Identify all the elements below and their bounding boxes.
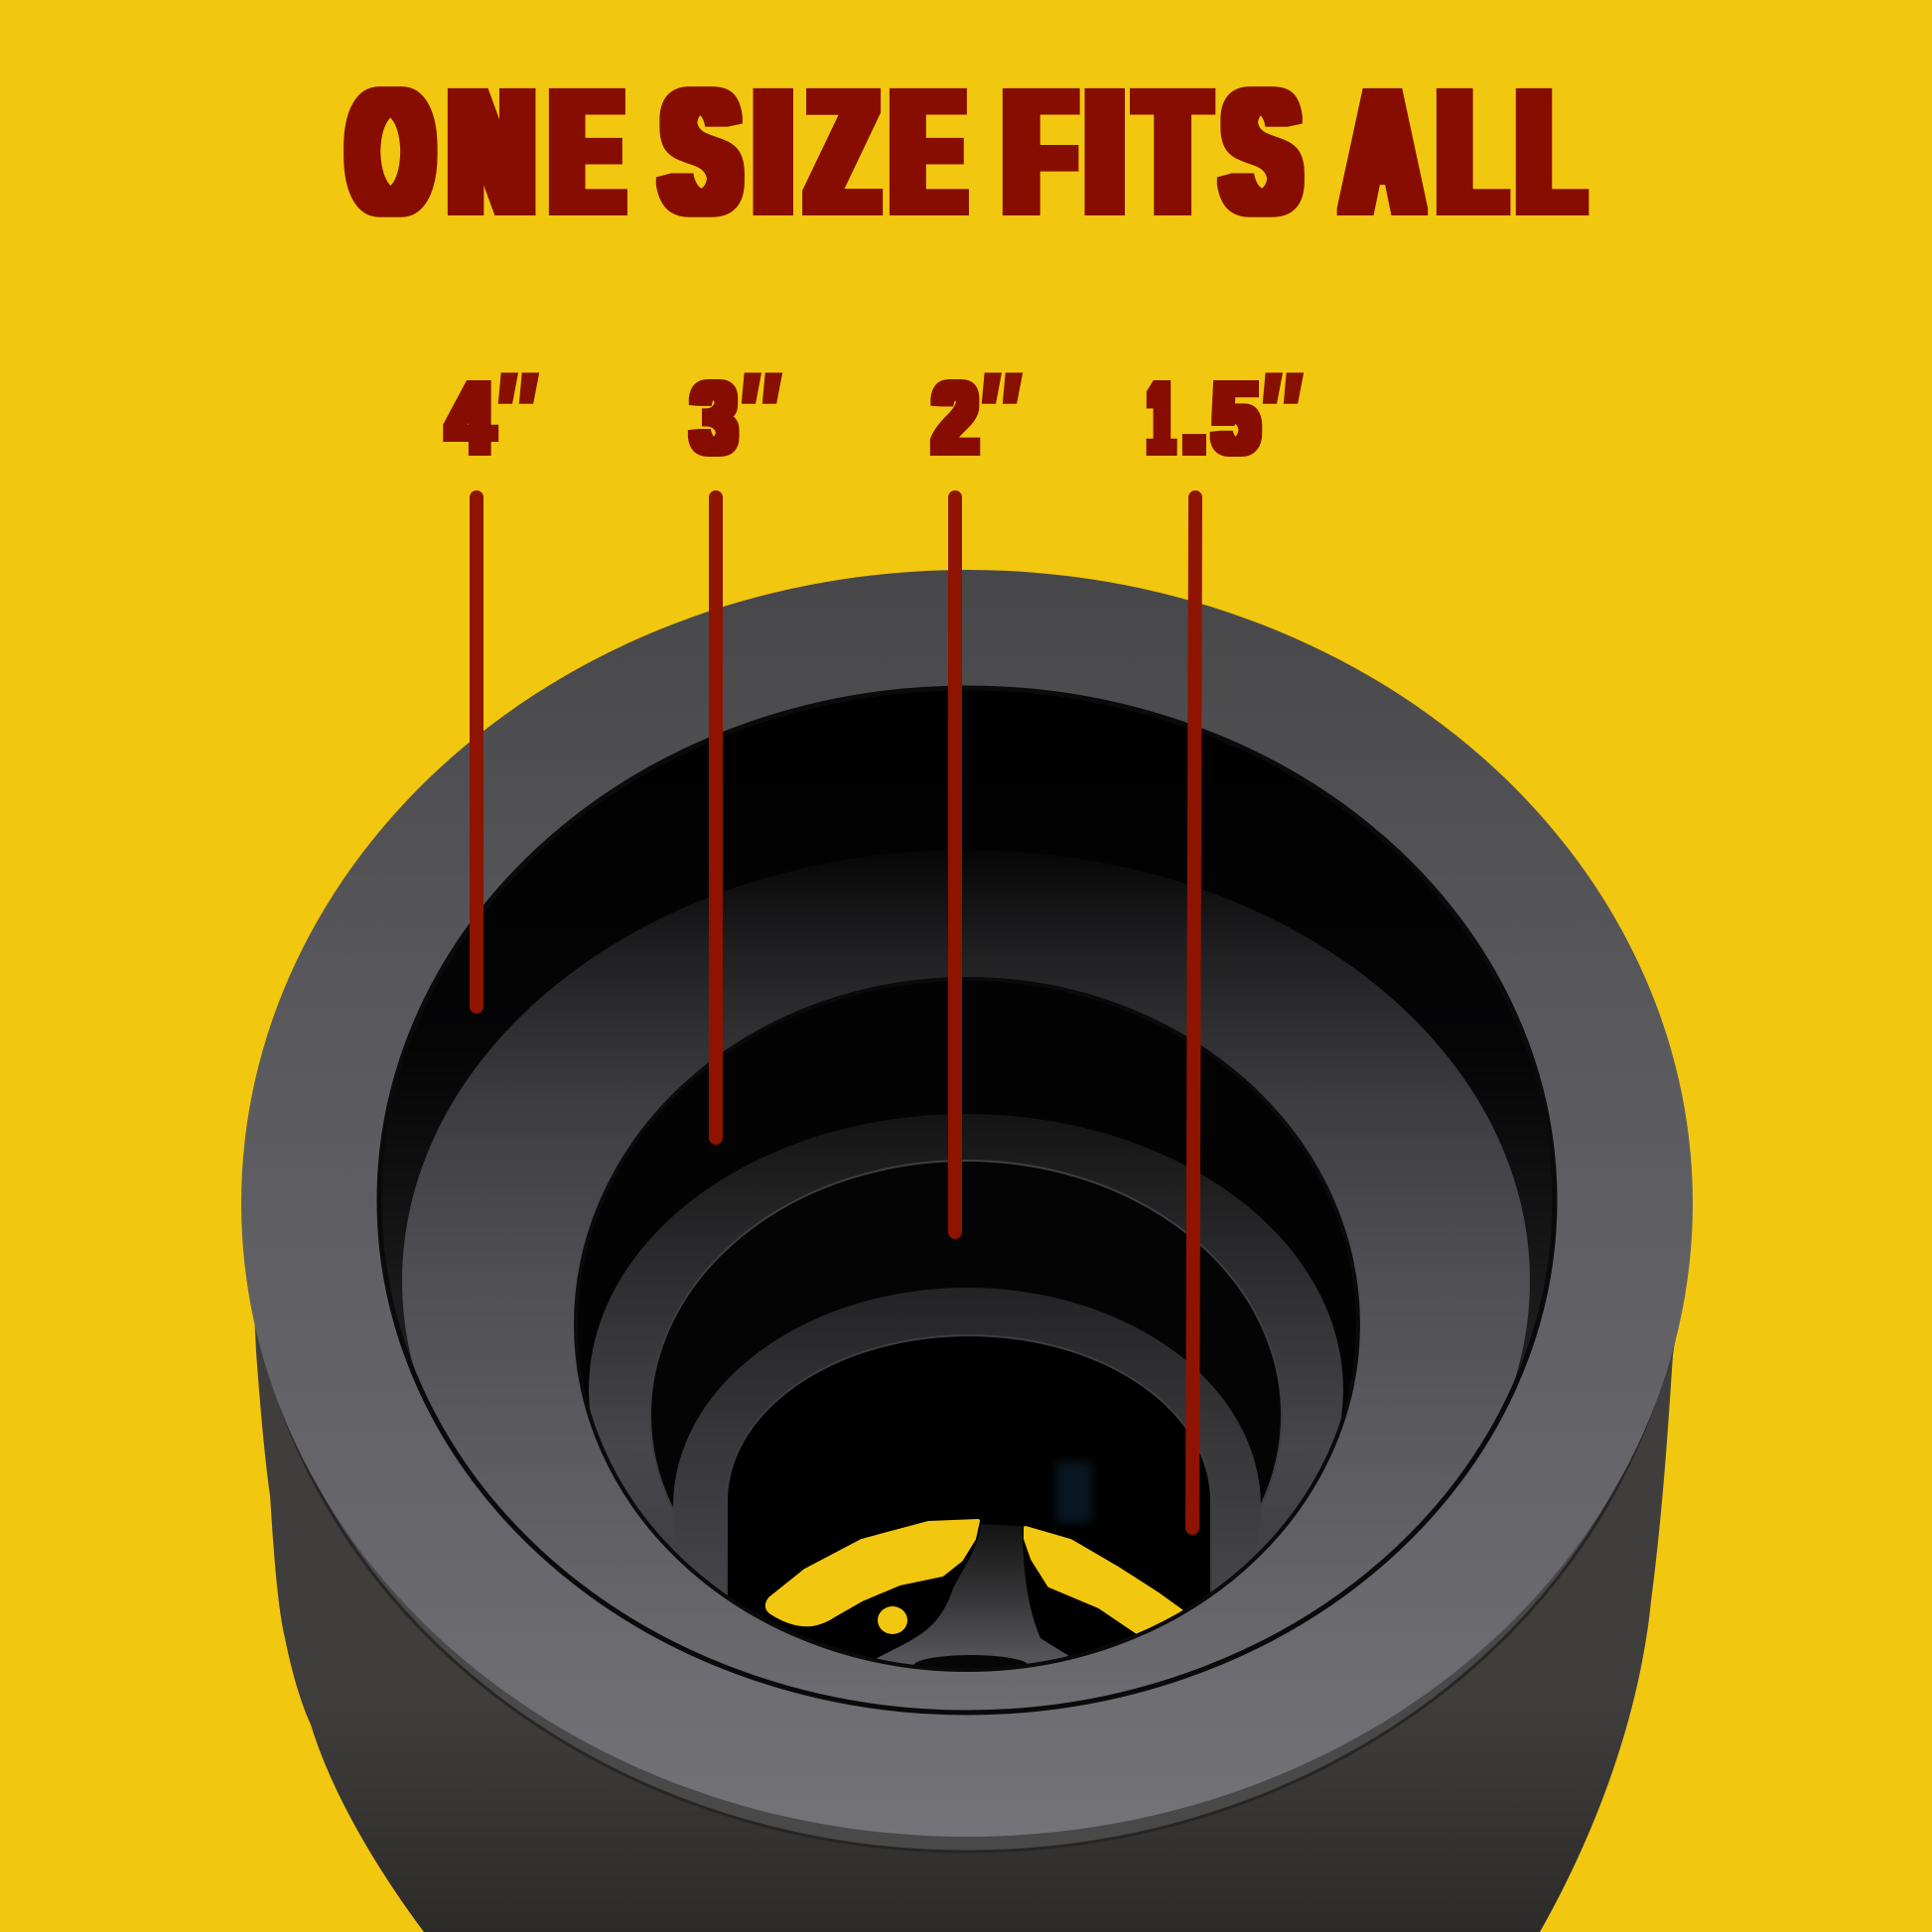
4 inch bore edge line <box>379 688 1555 1713</box>
3 inch bore edge line <box>576 979 1358 1670</box>
size label 1.5 inch: 5 <box>1213 363 1259 475</box>
4 inch bore <box>379 688 1555 1713</box>
small yellow hole <box>878 1606 907 1634</box>
1.5 inch bore <box>728 1334 1210 1665</box>
product body <box>254 1311 1680 1932</box>
size label 2 inch: 2 <box>933 363 977 475</box>
title: O <box>350 56 431 250</box>
size label 2 inch <box>933 351 1031 475</box>
depth line 3 inch <box>709 497 723 1138</box>
title: E <box>894 56 962 250</box>
size label 4 inch <box>448 351 547 475</box>
title: E <box>553 56 621 250</box>
size label 1.5 inch: 1 <box>1150 363 1173 475</box>
2 inch step ledge <box>673 1288 1261 1579</box>
3 inch bore <box>576 979 1358 1670</box>
right yellow opening <box>1026 1528 1181 1633</box>
size label 1.5 inch: " <box>1247 351 1311 474</box>
product: stepped rubber adapter <box>241 570 1693 1932</box>
title: N <box>451 56 532 250</box>
title: L <box>1520 56 1581 250</box>
faint reflection <box>1056 1461 1092 1523</box>
spoke <box>874 1524 1072 1672</box>
depth line 2 inch <box>948 497 962 1232</box>
title: S <box>1225 56 1298 250</box>
inner steps clipped to the 3 inch bore <box>589 1114 1343 1725</box>
size label 3 inch: 3 <box>692 363 737 475</box>
size label 1.5 inch <box>1150 351 1311 475</box>
title: I <box>1087 56 1123 250</box>
seam band under rim <box>247 575 1687 1852</box>
size label 3 inch: " <box>726 351 790 474</box>
size label 1.5 inch: . <box>1182 363 1206 475</box>
size label 4 inch: 4 <box>448 363 493 475</box>
2 inch bore <box>651 1160 1281 1507</box>
3 inch step ledge <box>589 1114 1343 1558</box>
size label 3 inch <box>692 351 790 475</box>
title: L <box>1441 56 1503 250</box>
spoke hub shadow <box>913 1655 1028 1668</box>
depth line 1.5 inch <box>1192 497 1195 1528</box>
title: S <box>663 56 738 250</box>
title: Z <box>810 56 875 250</box>
size label 2 inch: " <box>966 351 1031 474</box>
4 inch step ledge <box>402 850 1530 1712</box>
depth line 4 inch <box>470 497 483 1007</box>
title: A <box>1345 56 1420 250</box>
outer rim face <box>241 570 1693 1837</box>
left yellow opening <box>767 1521 978 1624</box>
size label 4 inch: " <box>483 351 547 474</box>
title: F <box>1007 56 1073 250</box>
title <box>350 56 1581 250</box>
title: I <box>756 56 791 250</box>
title: T <box>1140 56 1205 250</box>
